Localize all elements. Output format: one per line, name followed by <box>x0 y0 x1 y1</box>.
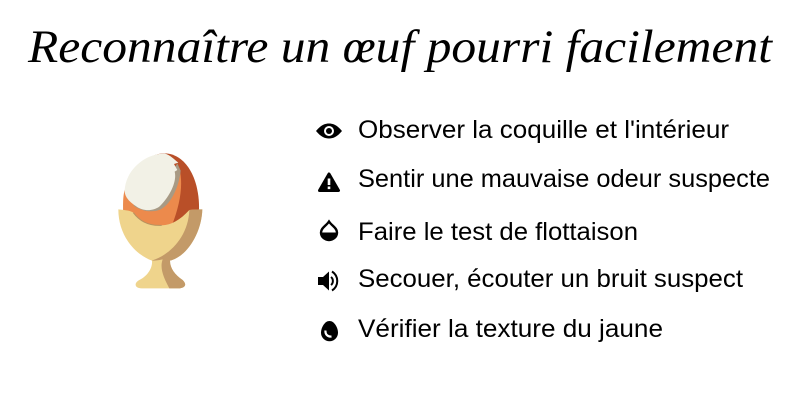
illustration: egg in egg cup <box>118 153 202 288</box>
egg white <box>125 154 178 210</box>
icon: egg with yolk crescent <box>321 321 338 341</box>
cup bowl <box>118 209 202 288</box>
icon: eye <box>316 124 342 138</box>
peeled shell <box>133 163 181 211</box>
cup rim shadow <box>133 213 162 225</box>
egg dark side <box>123 153 199 227</box>
item: shake: Secouer, écouter un bruit suspect <box>358 265 743 293</box>
icon: speaker <box>318 272 337 290</box>
cup shadow <box>152 209 202 288</box>
item: yolk texture: Vérifier la texture du jaune <box>358 315 663 343</box>
item: float test: Faire le test de flottaison <box>358 218 638 246</box>
icon: warning triangle <box>320 174 338 190</box>
icon: half-filled drop <box>320 222 338 240</box>
item: smell: Sentir une mauvaise odeur suspecte <box>358 165 770 193</box>
item: observe: Observer la coquille et l'intérieur <box>358 116 729 144</box>
egg orange side <box>123 168 181 227</box>
title: Reconnaître un œuf pourri facilement <box>27 21 773 73</box>
